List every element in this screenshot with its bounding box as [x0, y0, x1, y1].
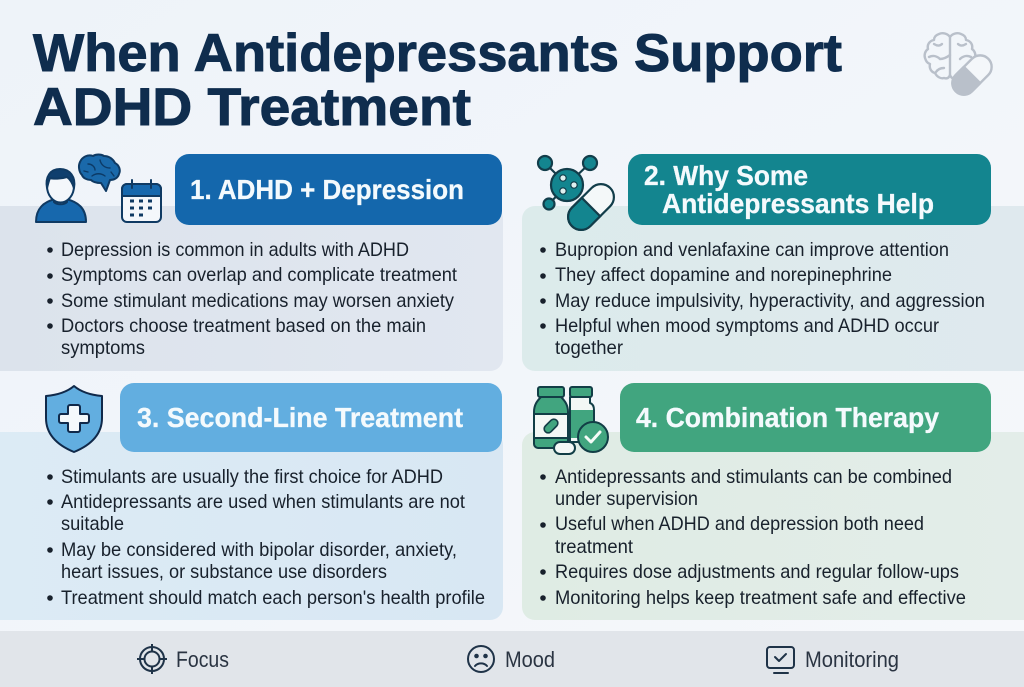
title	[33, 24, 842, 137]
monitoring item	[767, 647, 899, 673]
icon: target	[137, 644, 167, 674]
icon: molecule and capsule	[538, 156, 619, 235]
panel: Combination Therapy	[522, 383, 1024, 620]
bullet list: Depression is common in adults with ADHD	[61, 239, 409, 261]
heading banner: 4. Combination Therapy	[636, 402, 939, 433]
bullet list: Treatment should match each person's health profile	[61, 587, 485, 609]
bullet list: together	[555, 337, 623, 359]
icon: brain and capsule	[925, 33, 996, 99]
bullet list: suitable	[61, 513, 124, 535]
panel: ADHD + Depression	[0, 154, 503, 371]
bullet list: Requires dose adjustments and regular follow-ups	[555, 561, 959, 583]
panel background	[0, 432, 503, 620]
bullet list	[540, 466, 966, 609]
bullet list: Antidepressants are used when stimulants are not	[61, 491, 466, 513]
bullet list: under supervision	[555, 488, 698, 510]
icon: sad face	[468, 646, 494, 672]
bullet list: Monitoring helps keep treatment safe and effective	[555, 587, 966, 609]
bullet list: treatment	[555, 536, 634, 558]
heading banner: Antidepressants Help	[662, 188, 934, 219]
panel: Second-Line Treatment	[0, 383, 503, 620]
footer bar	[0, 631, 1024, 687]
heading banner	[620, 383, 991, 452]
heading banner	[120, 383, 502, 452]
focus item: Focus	[176, 647, 229, 672]
mood item: Mood	[505, 647, 555, 672]
heading banner: 2. Why Some	[644, 160, 808, 191]
panel background	[522, 206, 1024, 371]
bullet list: Useful when ADHD and depression both need	[555, 513, 924, 535]
mood item	[468, 646, 555, 672]
heading banner	[175, 154, 502, 225]
icon: medicine bottles and check	[534, 387, 608, 454]
focus item	[137, 644, 229, 674]
bullet list	[47, 239, 458, 359]
monitoring item: Monitoring	[805, 647, 899, 672]
panel background	[0, 206, 503, 371]
panel: Why Some Antidepressants Help	[522, 154, 1024, 371]
heading banner	[628, 154, 991, 225]
title: When Antidepressants Support	[33, 24, 842, 83]
heading banner: 3. Second-Line Treatment	[137, 402, 463, 433]
bullet list: Bupropion and venlafaxine can improve attention	[555, 239, 949, 261]
bullet list: symptoms	[61, 337, 145, 359]
bullet list: Antidepressants and stimulants can be combined	[555, 466, 952, 488]
icon: person, brain and calendar	[36, 154, 161, 222]
bullet list: May reduce impulsivity, hyperactivity, and aggression	[555, 290, 985, 312]
bullet list: Some stimulant medications may worsen anxiety	[61, 290, 454, 312]
bullet list: Helpful when mood symptoms and ADHD occur	[555, 315, 939, 337]
icon: checked monitor	[767, 647, 794, 673]
title: ADHD Treatment	[33, 78, 471, 137]
heading banner: 1. ADHD + Depression	[190, 174, 464, 205]
bullet list	[47, 466, 485, 609]
bullet list: May be considered with bipolar disorder, anxiety,	[61, 539, 457, 561]
bullet list	[540, 239, 985, 359]
bullet list: Symptoms can overlap and complicate treatment	[61, 264, 458, 286]
bullet list: Stimulants are usually the first choice for ADHD	[61, 466, 443, 488]
panel background	[522, 432, 1024, 620]
bullet list: heart issues, or substance use disorders	[61, 561, 387, 583]
bullet list: Doctors choose treatment based on the main	[61, 315, 426, 337]
bullet list: They affect dopamine and norepinephrine	[555, 264, 892, 286]
icon: shield with cross	[46, 386, 102, 452]
